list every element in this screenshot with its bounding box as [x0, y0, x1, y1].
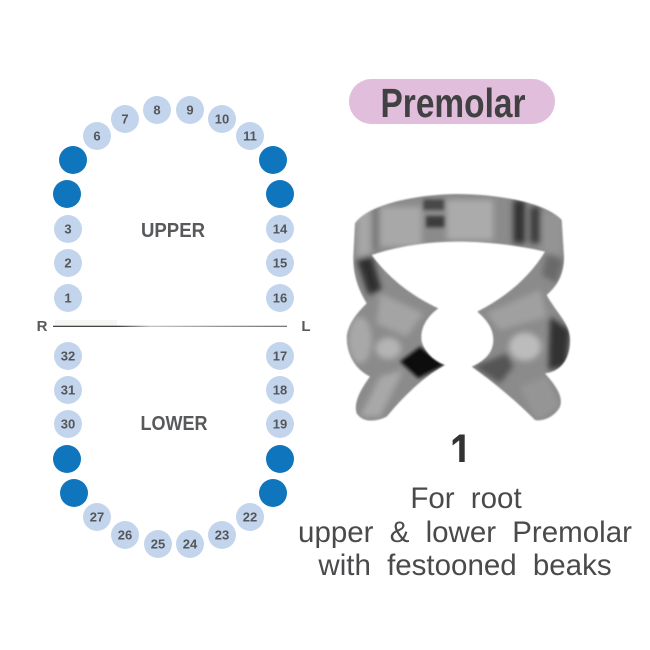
upper arch teeth: 14 [273, 222, 288, 236]
label: right side: R [37, 318, 48, 335]
lower arch teeth: 25 [151, 536, 165, 552]
upper arch teeth: 3 [64, 222, 72, 236]
upper arch teeth: 10 [215, 112, 229, 126]
upper arch teeth: 6 [93, 128, 101, 144]
icon: rubber dam clamp photo [346, 193, 571, 422]
lower arch teeth: 18 [273, 382, 287, 398]
upper arch teeth: 11 [243, 128, 257, 144]
upper arch teeth: 16 [273, 290, 287, 306]
highlighted upper premolars [53, 146, 294, 208]
label: upper: UPPER [141, 220, 206, 242]
lower arch teeth: 27 [90, 510, 104, 524]
lower arch teeth: 32 [61, 348, 75, 364]
description text: upper & lower Premolar [298, 516, 632, 549]
highlighted lower premolars [53, 445, 294, 507]
lower arch teeth: 22 [243, 510, 257, 524]
upper arch teeth: 2 [64, 256, 72, 270]
lower arch teeth: 31 [61, 382, 75, 398]
upper arch teeth: 9 [186, 102, 194, 118]
panel: tooth chart [37, 96, 311, 558]
upper arch teeth: 15 [273, 256, 287, 270]
infographic canvas [38, 79, 632, 576]
midline divider [53, 320, 287, 327]
lower arch teeth: 26 [118, 528, 132, 542]
lower arch teeth: 30 [61, 416, 75, 432]
lower arch teeth: 17 [273, 348, 287, 364]
upper arch teeth: 8 [153, 102, 161, 118]
upper arch teeth [54, 96, 294, 312]
heading: Premolar pill: Premolar [380, 80, 526, 126]
label: left side: L [301, 318, 311, 335]
description text [298, 482, 632, 582]
label: lower: LOWER [140, 413, 208, 435]
upper arch teeth: 7 [121, 112, 129, 126]
lower arch teeth: 19 [273, 416, 287, 432]
lower arch teeth: 23 [215, 528, 229, 542]
upper arch teeth: 1 [64, 290, 72, 306]
lower arch teeth: 24 [183, 536, 198, 552]
lower arch teeth [54, 342, 294, 558]
clamp number: 1 [450, 424, 472, 480]
description text: with festooned beaks [317, 549, 612, 582]
description text: For root [410, 482, 522, 515]
